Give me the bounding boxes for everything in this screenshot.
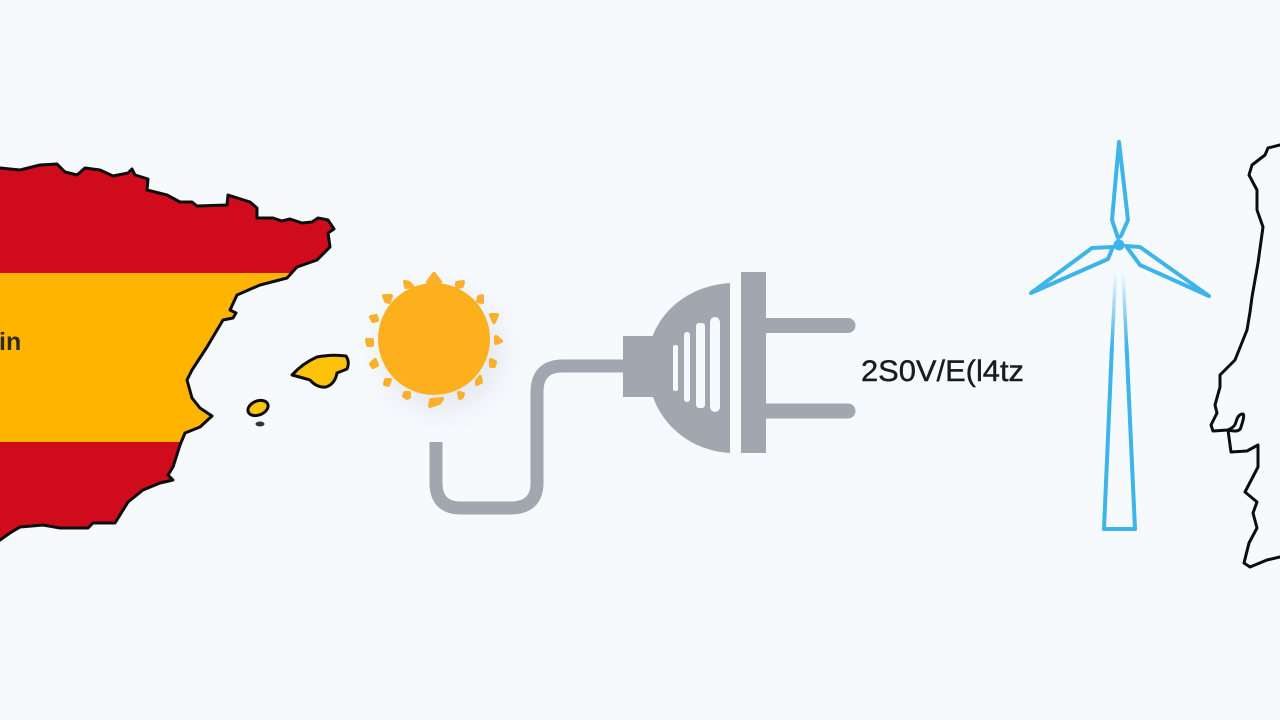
Balearic island: Mallorca <box>292 355 348 387</box>
plug dome with vent slots <box>653 283 730 453</box>
voltage label: 2S0V/E(l4tz <box>861 355 1024 388</box>
plug prongs <box>765 326 848 411</box>
icon: sun <box>367 274 504 412</box>
plug neck <box>623 336 657 397</box>
icon: wind turbine <box>1031 142 1209 529</box>
cord <box>436 366 630 508</box>
map outline of Portugal coast <box>1211 145 1280 567</box>
top blade <box>1112 142 1128 238</box>
icon: plug with cord <box>436 272 848 508</box>
plug face plate <box>741 272 766 453</box>
tower <box>1104 345 1135 529</box>
right blade <box>1126 246 1209 296</box>
left blade <box>1031 247 1113 293</box>
map of Spain with flag stripes <box>0 150 340 552</box>
hub <box>1116 242 1122 248</box>
Balearic island: Ibiza <box>246 398 270 426</box>
